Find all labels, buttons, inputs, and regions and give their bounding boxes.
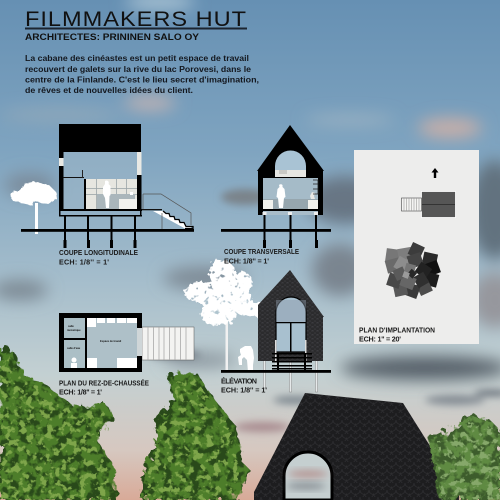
caption: site plan bbox=[359, 326, 435, 344]
roof mass bbox=[59, 124, 141, 152]
elevation drawing bbox=[184, 260, 331, 392]
caption: site plan: ECH: 1'' = 20' bbox=[359, 334, 401, 344]
room labels: salle bbox=[68, 324, 74, 328]
interior bbox=[63, 151, 137, 209]
floor and piles bbox=[59, 209, 142, 211]
attic opening bbox=[275, 150, 306, 177]
hut body with shingles bbox=[258, 270, 324, 361]
description text bbox=[25, 53, 259, 95]
room labels: Espace de travail bbox=[100, 339, 121, 343]
person silhouette bbox=[238, 346, 254, 372]
tree silhouette: elevation bbox=[184, 260, 269, 371]
caption: floor plan bbox=[59, 378, 149, 396]
tree: middle bbox=[142, 372, 250, 500]
description text: centre de la Finlande. C'est le lieu secret d'imagination, bbox=[25, 74, 259, 84]
platform and piles bbox=[263, 209, 318, 211]
title underline bbox=[25, 28, 247, 30]
tree: left bbox=[0, 350, 116, 500]
exterior stair bbox=[153, 211, 191, 228]
built-in furniture bbox=[71, 318, 137, 368]
person silhouette bbox=[276, 184, 286, 208]
caption: longitudinal section: ECH: 1/8'' = 1' bbox=[59, 258, 109, 266]
floor plan drawing bbox=[59, 313, 194, 372]
room labels: mécanique bbox=[67, 328, 81, 332]
caption: elevation: ÉLÉVATION bbox=[221, 376, 257, 386]
foreground trees bbox=[0, 350, 500, 500]
longitudinal section drawing bbox=[10, 124, 194, 248]
ground line bbox=[221, 370, 331, 373]
room labels: salle d'eau bbox=[67, 346, 81, 350]
hut roof plan bbox=[402, 192, 456, 218]
caption: longitudinal section: COUPE LONGITUDINALE bbox=[59, 248, 138, 257]
caption: transverse section: COUPE TRANSVERSALE bbox=[224, 247, 299, 256]
tree silhouette: section bbox=[10, 182, 57, 234]
description text: La cabane des cinéastes est un petit espace de travail bbox=[25, 53, 249, 63]
arched window bbox=[275, 297, 306, 365]
caption: site plan: PLAN D'IMPLANTATION bbox=[359, 326, 435, 334]
subtitle: architects: ARCHITECTES: PRININEN SALO OY bbox=[25, 32, 200, 43]
icon: north arrow bbox=[432, 168, 438, 178]
arched opening bbox=[284, 452, 332, 500]
panel: site plan bbox=[354, 150, 479, 344]
walls bbox=[59, 152, 64, 209]
tree: right bbox=[430, 415, 500, 500]
caption: longitudinal section bbox=[59, 248, 138, 266]
ground line bbox=[21, 229, 194, 232]
caption: elevation bbox=[221, 376, 267, 394]
person silhouette bbox=[103, 180, 110, 208]
roof and walls bbox=[257, 125, 324, 215]
caption: floor plan: ECH: 1/8'' = 1' bbox=[59, 388, 102, 396]
caption: elevation: ECH: 1/8'' = 1' bbox=[221, 386, 267, 394]
mezzanine bbox=[63, 177, 84, 178]
interior room bbox=[263, 178, 318, 209]
entry steps bbox=[272, 353, 312, 371]
transverse section drawing bbox=[221, 125, 331, 248]
rooms bbox=[64, 318, 85, 338]
piles bbox=[264, 360, 318, 392]
ground line bbox=[221, 229, 331, 232]
caption: transverse section: ECH: 1/8'' = 1' bbox=[224, 256, 269, 266]
caption: floor plan: PLAN DU REZ-DE-CHAUSSÉE bbox=[59, 378, 149, 388]
outer walls bbox=[59, 313, 142, 372]
site vegetation rosette bbox=[385, 242, 441, 299]
room labels bbox=[67, 324, 121, 350]
description text: recouvert de galets sur la rive du lac Porovesi, dans le bbox=[25, 64, 251, 74]
deck bbox=[142, 327, 194, 360]
caption: transverse section bbox=[224, 247, 299, 266]
title: FILMMAKERS HUT bbox=[25, 7, 247, 31]
foreground hut with shingled roof bbox=[254, 393, 459, 500]
description text: de rêves et de nouvelles idées du client. bbox=[25, 85, 193, 95]
